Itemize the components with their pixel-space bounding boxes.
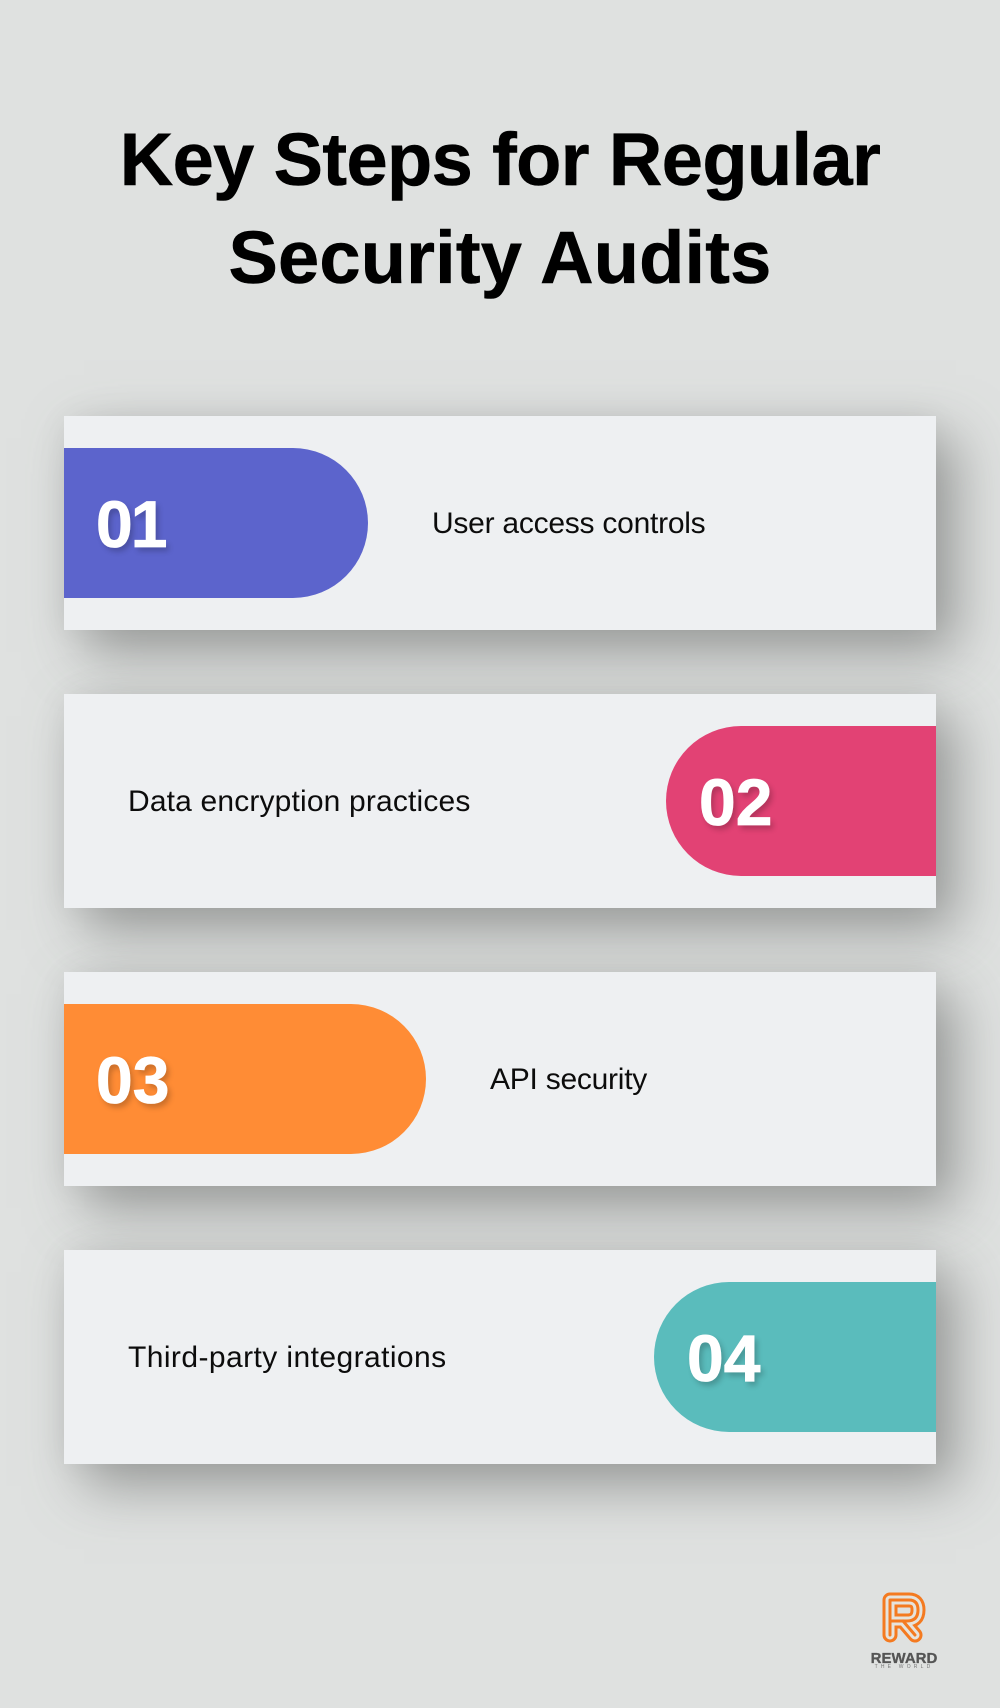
label: third-party integrations: Third-party integrations (128, 1341, 447, 1374)
panel: step 01 (64, 416, 936, 630)
label: user access controls: User access controls (432, 507, 705, 540)
number pill 04: 04 (687, 1321, 760, 1395)
number pill 02: 02 (699, 765, 772, 839)
number pill 02 (666, 726, 936, 876)
icon: R mark (890, 1600, 918, 1635)
number pill 03: 03 (96, 1043, 169, 1117)
logo wordmark: REWARD (871, 1650, 937, 1667)
number pill 01 (64, 448, 368, 598)
number pill 03 (64, 1004, 426, 1154)
title: Security Audits (228, 216, 772, 299)
number pill 04 (654, 1282, 936, 1432)
panel: step 03 (64, 972, 936, 1186)
label: data encryption practices: Data encryption practices (128, 785, 470, 818)
number pill 01: 01 (96, 487, 165, 561)
logo tagline: THE WORLD (875, 1664, 933, 1670)
label: API security: API security (490, 1063, 647, 1096)
logo: Reward the World (871, 1592, 937, 1670)
title (120, 118, 880, 299)
title: Key Steps for Regular (120, 118, 880, 201)
panel: step 04 (64, 1250, 936, 1464)
panel: step 02 (64, 694, 936, 908)
